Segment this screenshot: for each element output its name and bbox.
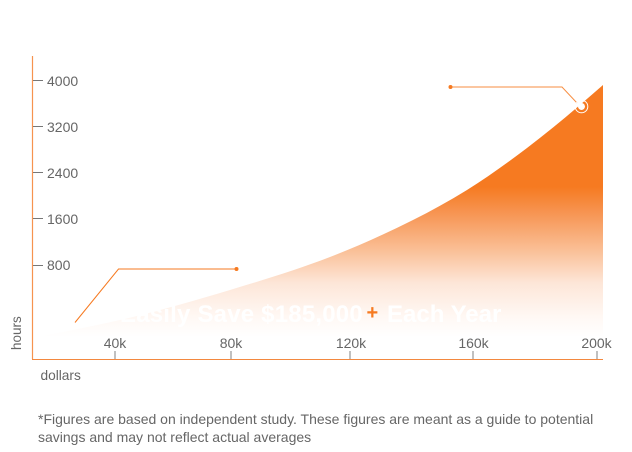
footnote [38,411,593,445]
x axis label 40k: 40k [104,335,127,351]
x axis label 160k: 160k [458,335,490,351]
y axis label 1600: 1600 [47,211,78,227]
y axis label 2400 [33,165,78,181]
headline over curve: Each Year [387,301,501,328]
y axis label 3200: 3200 [47,119,78,135]
x axis label 120k [336,335,367,359]
y axis label 800: 800 [47,257,71,273]
x axis label 160k [458,335,490,359]
x axis label 40k [104,335,127,359]
x axis label 80k [220,335,243,359]
y axis label 4000 [33,73,78,89]
y axis [32,56,78,359]
x axis title: dollars [40,368,81,383]
x axis label 200k: 200k [581,335,613,351]
footnote: *Figures are based on independent study. These figures are meant as a guide to potential [38,411,593,427]
callout: upper right leader [448,85,588,113]
callout: lower left leader [75,267,238,322]
y axis title: hours [9,316,24,350]
x axis label 200k [581,335,613,359]
footnote: savings and may not reflect actual averages [38,429,311,445]
headline over curve: Easily Save $185,000 [120,301,363,328]
y axis label 4000: 4000 [47,73,78,89]
x axis [32,335,613,360]
y axis label 2400: 2400 [47,165,78,181]
area curve [43,85,603,337]
headline over curve [120,301,501,328]
y axis label 1600 [33,211,78,227]
x axis label 120k: 120k [336,335,367,351]
x axis label 80k: 80k [220,335,243,351]
headline over curve: + [366,302,378,324]
y axis label 800 [33,257,71,273]
y axis label 3200 [33,119,78,135]
